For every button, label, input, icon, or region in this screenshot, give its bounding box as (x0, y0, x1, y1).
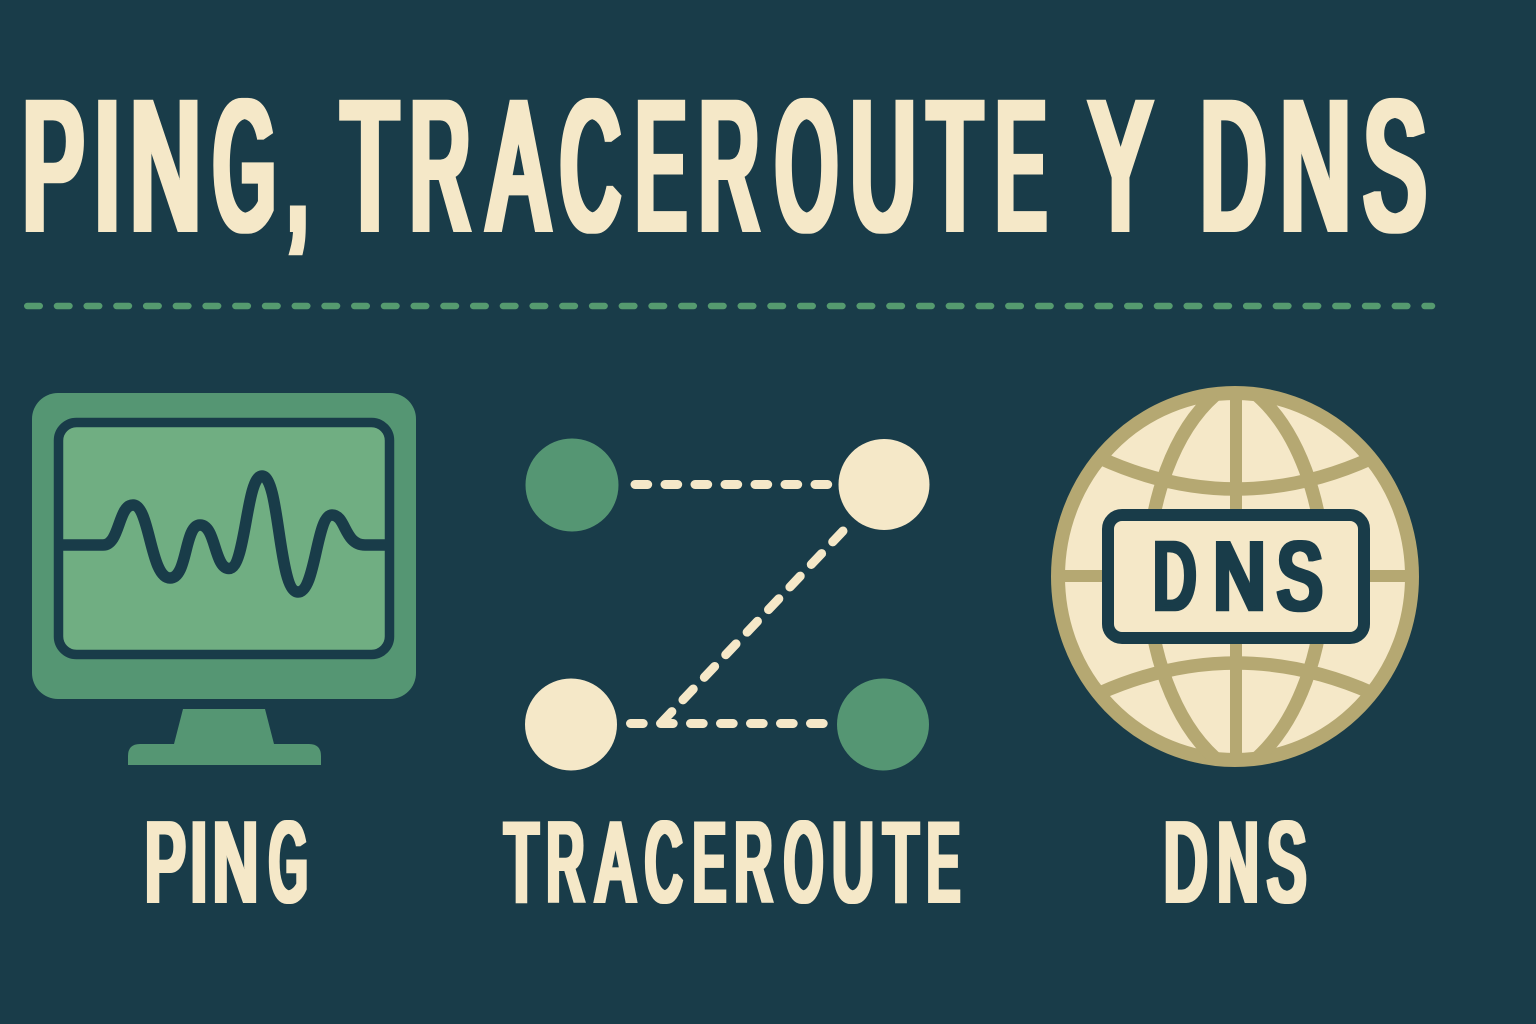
title: N (1281, 64, 1350, 268)
icon: monitor with ping waveform (32, 393, 416, 765)
title: O (776, 64, 837, 268)
label: PING: P (145, 800, 186, 924)
title: T (342, 64, 398, 268)
label: TRACEROUTE: A (597, 800, 634, 924)
icon: DNS globe (1058, 392, 1412, 761)
label: DNS: N (1218, 800, 1258, 924)
title: U (851, 64, 915, 268)
icon: DNS globe: D (1154, 523, 1196, 630)
title (23, 64, 1425, 268)
label: PING: N (213, 800, 258, 924)
text: E (927, 800, 959, 924)
title: G (214, 64, 275, 268)
title: A (489, 64, 548, 268)
title: S (1364, 64, 1425, 268)
label: TRACEROUTE: U (832, 800, 874, 924)
icon: DNS globe: N (1214, 523, 1265, 630)
label: TRACEROUTE: T (884, 800, 918, 924)
title: N (131, 64, 200, 268)
title: I (94, 64, 120, 268)
title: E (996, 64, 1045, 268)
title: P (23, 64, 84, 268)
icon: traceroute network diagram (525, 438, 930, 770)
title: E (636, 64, 685, 268)
icon: DNS globe: S (1277, 523, 1322, 630)
label: PING: I (190, 800, 207, 924)
title: R (700, 64, 759, 268)
label: TRACEROUTE: R (735, 800, 772, 924)
title: , (288, 64, 308, 268)
label: TRACEROUTE: C (646, 800, 682, 924)
label: DNS: S (1267, 800, 1306, 924)
title: C (561, 64, 620, 268)
label: TRACEROUTE: E (693, 800, 725, 924)
title: D (1201, 64, 1265, 268)
label: DNS: D (1164, 800, 1207, 924)
label: TRACEROUTE: R (547, 800, 584, 924)
title: Y (1091, 64, 1151, 268)
title: R (410, 64, 470, 268)
label: TRACEROUTE: T (505, 800, 538, 924)
title: T (928, 64, 982, 268)
text: G (270, 800, 307, 924)
label: TRACEROUTE: O (785, 800, 822, 924)
